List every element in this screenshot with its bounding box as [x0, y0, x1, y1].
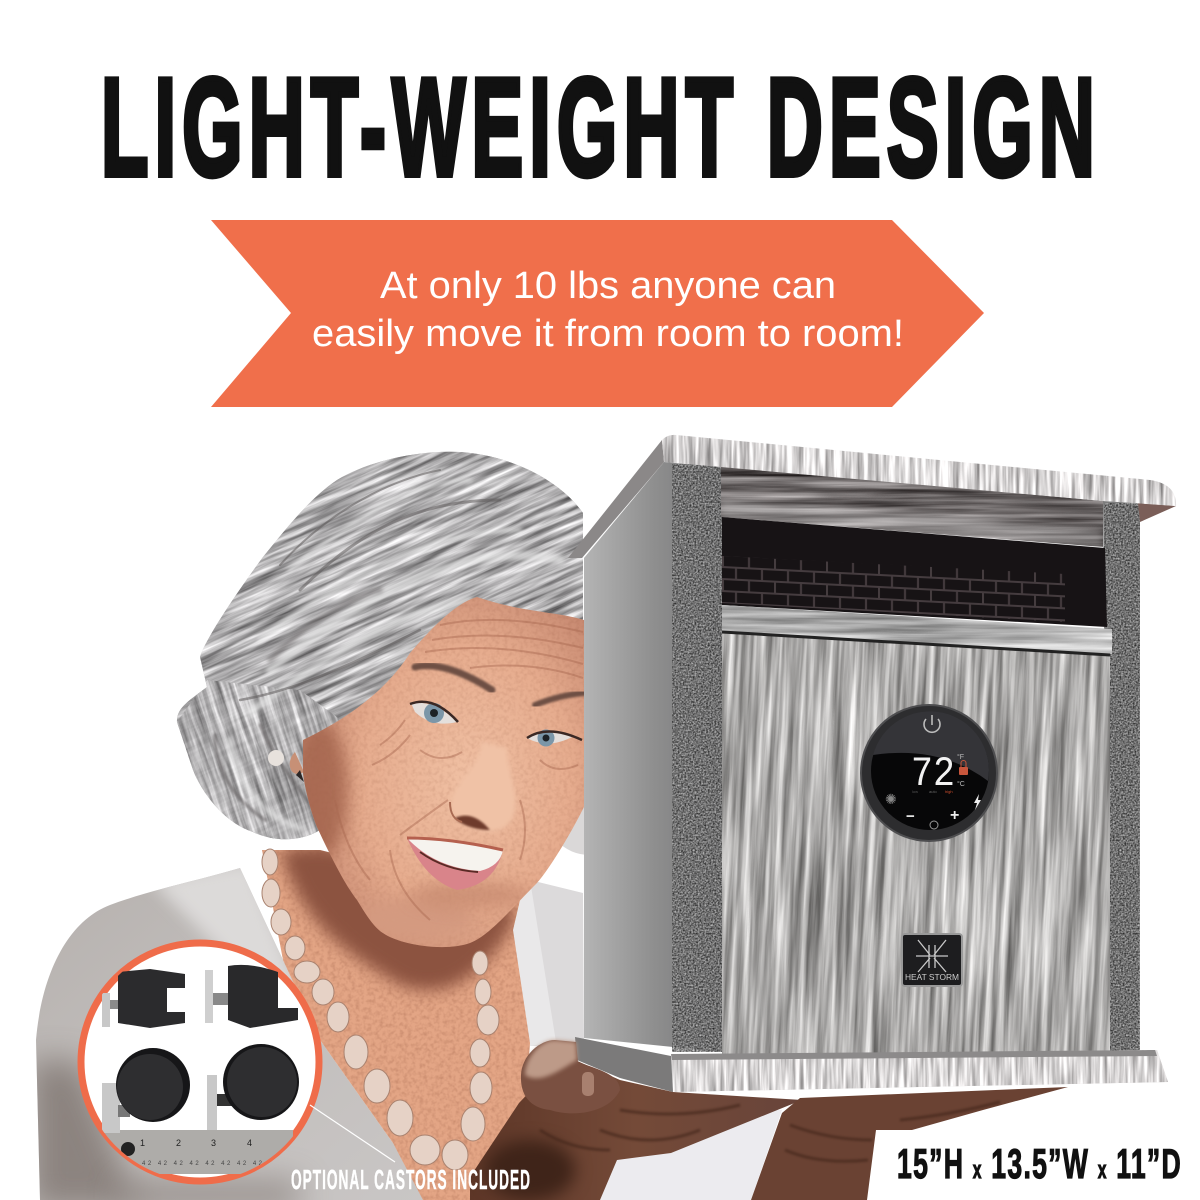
control dial: auto: [929, 789, 938, 794]
minus plus: −: [906, 808, 915, 825]
necklace: [262, 849, 499, 1170]
control dial: [861, 705, 997, 841]
ruler: 42 42 42 42 42 42 42 42: [142, 1161, 263, 1167]
mode labels: low: [912, 789, 918, 794]
wrinkles: [335, 620, 583, 920]
control dial: °F: [957, 753, 964, 761]
jacket: [30, 860, 782, 1200]
eyebrows: [415, 666, 584, 705]
hands: [470, 1040, 1068, 1200]
control dial: +: [950, 807, 959, 824]
right hand and wrist: [751, 1087, 1068, 1200]
door: [722, 630, 1110, 1054]
ruler: [100, 1130, 293, 1174]
heater: [568, 432, 1180, 1112]
banner arrow: [211, 220, 984, 407]
hair: [176, 452, 584, 854]
neck and chest: [260, 845, 540, 1200]
ruler: 2: [176, 1138, 181, 1148]
base: [575, 1037, 1170, 1094]
heater right pillar: [1103, 501, 1140, 1052]
ear with earring: [268, 750, 304, 782]
ruler: 3: [211, 1138, 216, 1148]
heater side: [584, 462, 722, 1052]
infographic canvas: OPTIONAL CASTORS INCLUDED: [291, 1164, 531, 1195]
woman: [0, 218, 802, 1200]
castor inset: [81, 943, 319, 1181]
top rail: [720, 464, 1106, 550]
lock icon: [959, 760, 968, 775]
castor bottom left: [102, 1048, 190, 1133]
castor top left: [102, 969, 185, 1028]
dark strands: [215, 470, 500, 820]
eyes: [410, 702, 582, 746]
sleeve white: [600, 1110, 782, 1200]
nose: [450, 742, 516, 831]
power icon: [924, 715, 940, 732]
ruler: 4: [247, 1138, 252, 1148]
control dial: high: [945, 789, 953, 794]
ruler: 1: [140, 1138, 145, 1148]
banner text: At only 10 lbs anyone can: [380, 265, 836, 307]
timer: [930, 821, 938, 829]
sun icon: ✺: [885, 791, 897, 807]
light band: [230, 480, 560, 828]
bolt icon: [974, 794, 981, 810]
face: [292, 595, 585, 950]
control dial: °C: [957, 780, 965, 788]
castor bottom right: [207, 1044, 299, 1130]
castor top right: [205, 965, 298, 1028]
left hand and thumb: [470, 1040, 802, 1200]
banner arrow: easily move it from room to room!: [312, 313, 904, 355]
callout line: [310, 1105, 395, 1162]
brand badge: HEAT STORM: [905, 972, 959, 982]
temperature: 72: [911, 750, 955, 798]
wood band: [720, 603, 1114, 656]
brand badge: [902, 934, 962, 986]
cap: [568, 432, 1180, 558]
grille: [722, 517, 1107, 627]
smile: [407, 838, 503, 890]
